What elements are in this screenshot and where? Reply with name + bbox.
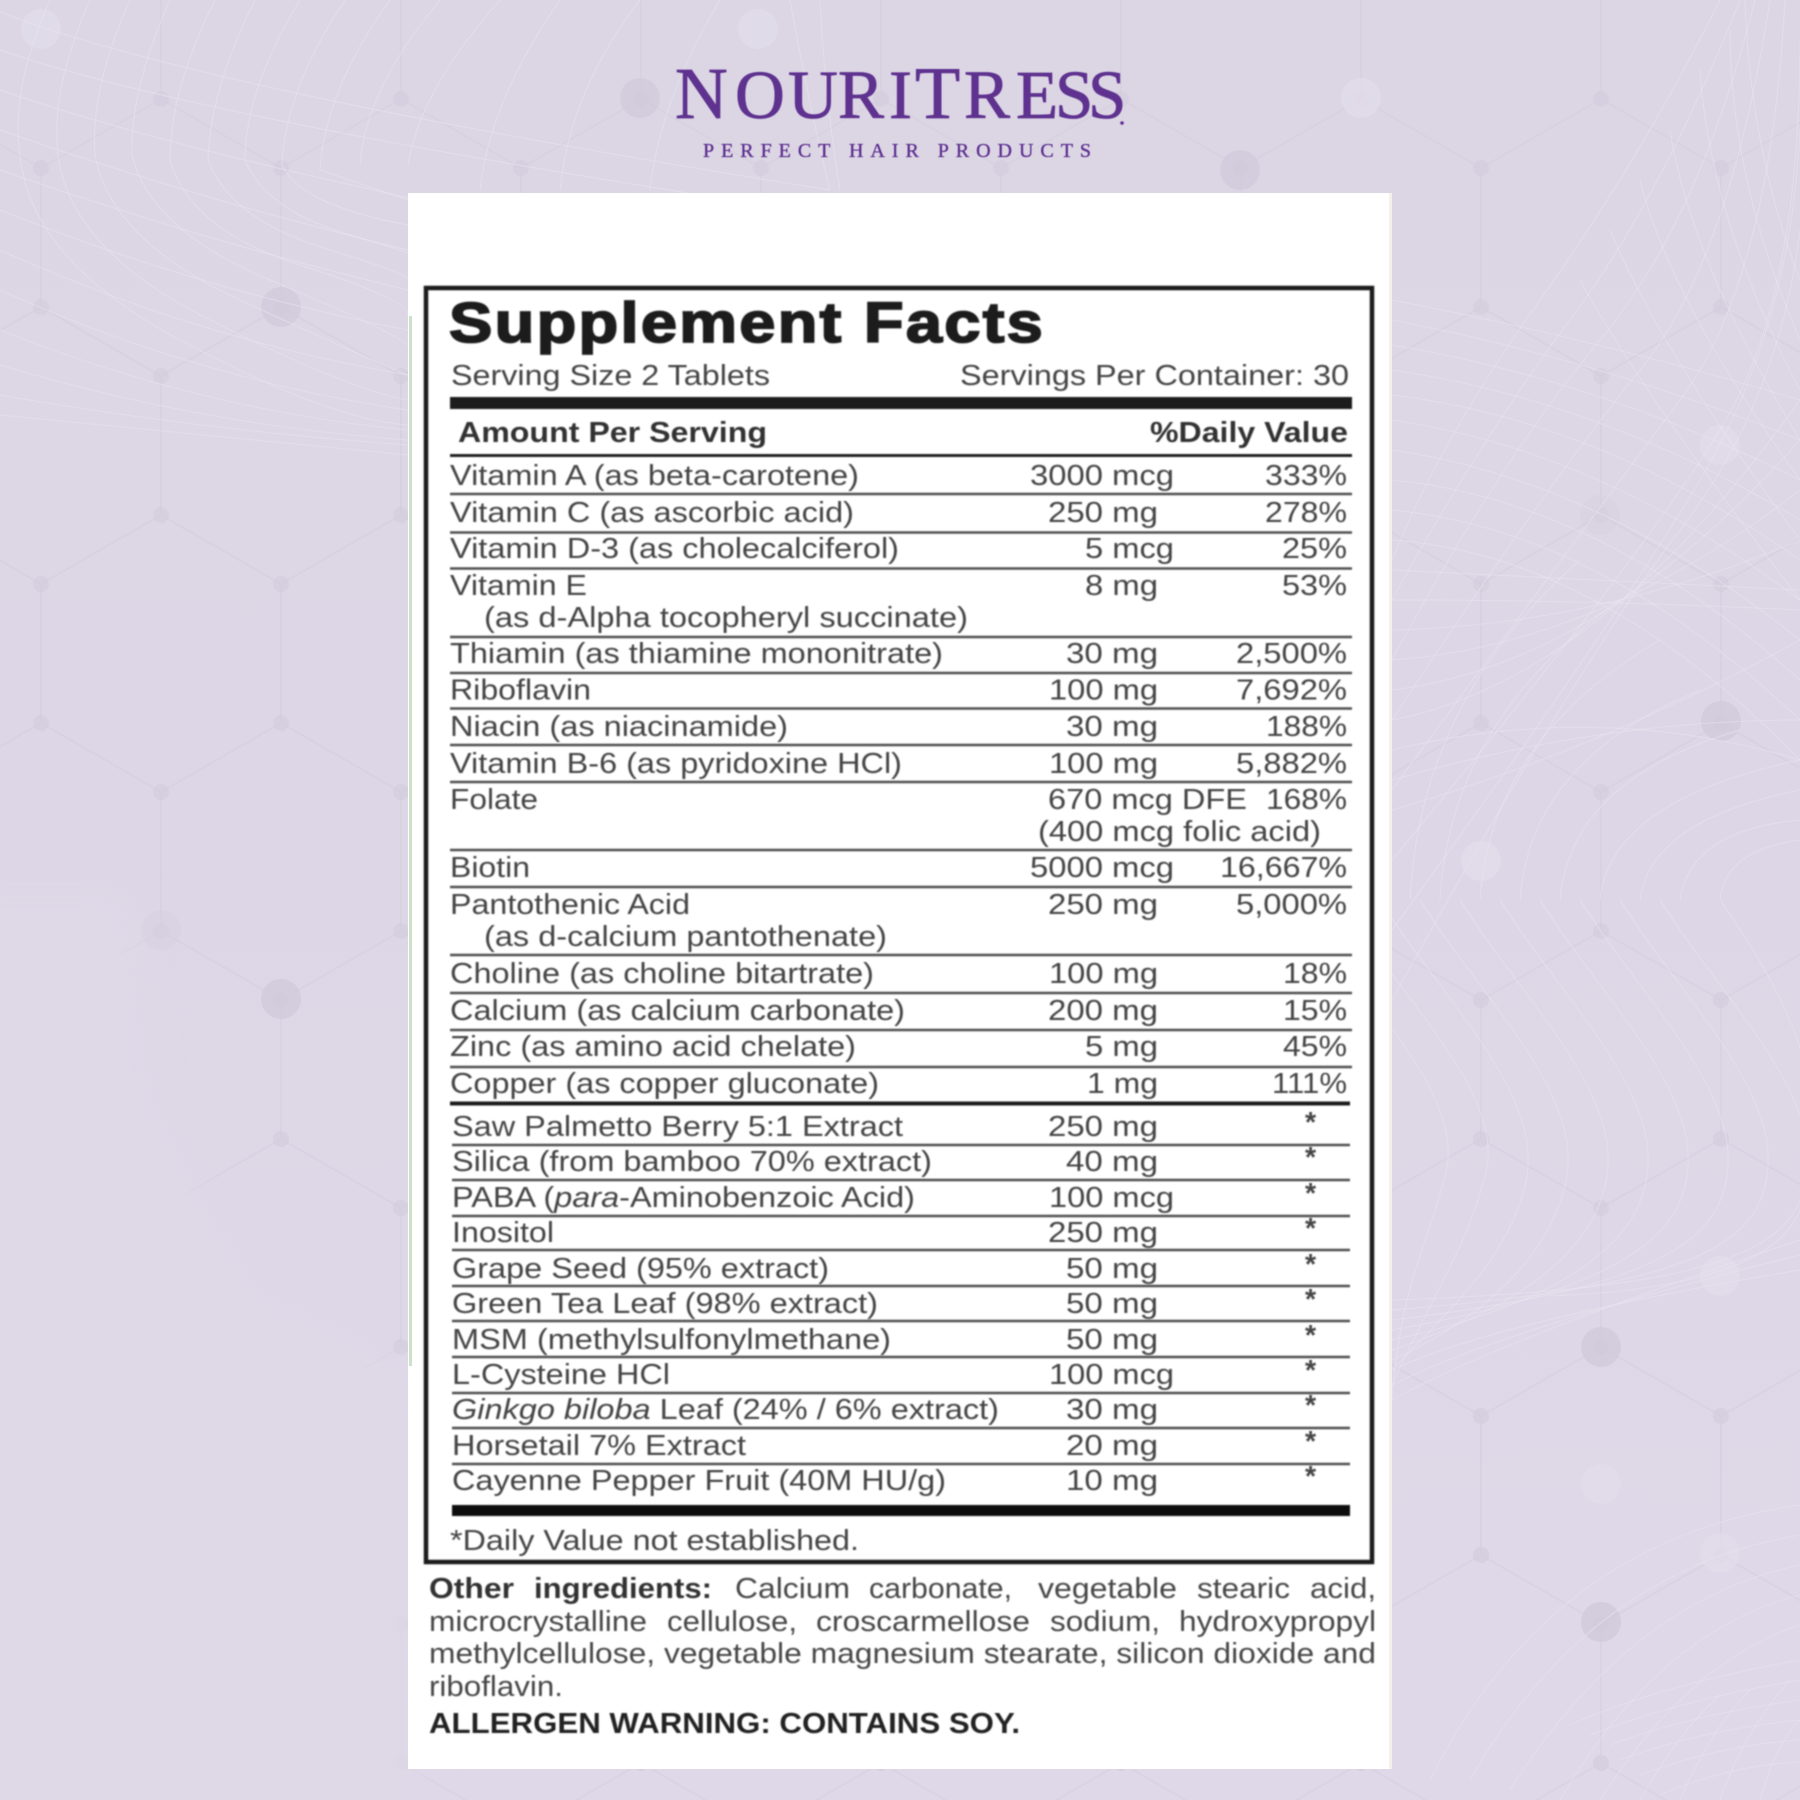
row: PABA: 100 mcg bbox=[1049, 1182, 1174, 1214]
row: Choline bbox=[450, 958, 1347, 990]
row: Green Tea Leaf: * bbox=[1305, 1284, 1317, 1316]
row: Riboflavin: 100 mg bbox=[1049, 674, 1158, 706]
row: Cayenne Pepper bbox=[452, 1461, 1317, 1497]
row: Vitamin A: 3000 mcg bbox=[1030, 460, 1174, 492]
row: L-Cysteine: L-Cysteine HCl bbox=[452, 1359, 670, 1391]
row: Green Tea Leaf: Green Tea Leaf (98% extract) bbox=[452, 1288, 878, 1320]
row: Biotin: 16,667% bbox=[1220, 852, 1347, 884]
serving size: Serving Size 2 Tablets bbox=[451, 360, 770, 392]
text block: other ingredients: Calcium bbox=[735, 1573, 850, 1605]
row: Choline: Choline (as choline bitartrate) bbox=[450, 958, 874, 990]
row: Calcium: 15% bbox=[1283, 995, 1347, 1027]
row: Copper: 111% bbox=[1272, 1068, 1347, 1100]
row: Copper: 1 mg bbox=[1087, 1068, 1158, 1100]
text block: other ingredients: stearic bbox=[1197, 1573, 1290, 1605]
row: Pantothenic Acid: (as d-calcium pantothenate) bbox=[484, 921, 887, 953]
row: MSM bbox=[452, 1320, 1317, 1356]
row: Niacin: Niacin (as niacinamide) bbox=[450, 711, 788, 743]
row: Thiamin: 2,500% bbox=[1236, 638, 1347, 670]
allergen warning: ALLERGEN WARNING: CONTAINS SOY. bbox=[429, 1708, 1020, 1740]
row: Biotin bbox=[450, 852, 1347, 884]
row: Pantothenic Acid: 5,000% bbox=[1236, 889, 1347, 921]
row: Cayenne Pepper: * bbox=[1305, 1461, 1317, 1493]
text block: other ingredients: Other bbox=[429, 1573, 514, 1605]
row: Pantothenic Acid: Pantothenic Acid bbox=[450, 889, 690, 921]
row: Folate bbox=[450, 784, 1347, 848]
row: Folate: 168% bbox=[1266, 784, 1347, 816]
wordmark: NOURITRESS bbox=[675, 53, 1126, 135]
row: PABA: * bbox=[1305, 1178, 1317, 1210]
row: Calcium bbox=[450, 995, 1347, 1027]
text block: other ingredients: cellulose, bbox=[667, 1606, 797, 1638]
column header: amount per serving: Amount Per Serving bbox=[458, 417, 767, 449]
text block: other ingredients: ingredients: bbox=[534, 1573, 712, 1605]
row: Grape Seed bbox=[452, 1249, 1317, 1285]
row: Biotin: 5000 mcg bbox=[1030, 852, 1174, 884]
tagline: PERFECT HAIR PRODUCTS bbox=[703, 140, 1091, 162]
row: Niacin: 30 mg bbox=[1066, 711, 1158, 743]
row: Horsetail: Horsetail 7% Extract bbox=[452, 1430, 746, 1462]
text block: other ingredients: sodium, bbox=[1050, 1606, 1160, 1638]
row: Green Tea Leaf: 50 mg bbox=[1066, 1288, 1158, 1320]
row: Riboflavin: Riboflavin bbox=[450, 674, 591, 706]
row: Vitamin E bbox=[450, 570, 1347, 634]
row: Vitamin B-6: Vitamin B-6 (as pyridoxine HCl) bbox=[450, 748, 902, 780]
row: L-Cysteine bbox=[452, 1355, 1317, 1391]
row: Calcium: 200 mg bbox=[1048, 995, 1158, 1027]
row: Inositol: * bbox=[1305, 1213, 1317, 1245]
row: Silica bbox=[452, 1142, 1317, 1178]
row: Folate: 670 mcg DFE bbox=[1048, 784, 1247, 816]
row: Copper bbox=[450, 1068, 1347, 1100]
row: Calcium: Calcium (as calcium carbonate) bbox=[450, 995, 905, 1027]
text block: other ingredients: vegetable bbox=[1038, 1573, 1177, 1605]
row: Zinc: 5 mg bbox=[1085, 1031, 1158, 1063]
row: Ginkgo biloba: Ginkgo biloba Leaf (24% / 6% extract) bbox=[452, 1394, 999, 1426]
row: Horsetail: 20 mg bbox=[1066, 1430, 1158, 1462]
row: Vitamin C bbox=[450, 497, 1347, 529]
heading: Supplement Facts: Supplement Facts bbox=[449, 291, 1045, 354]
row: Thiamin bbox=[450, 638, 1347, 670]
row: Saw Palmetto: * bbox=[1305, 1107, 1317, 1139]
row: MSM: MSM (methylsulfonylmethane) bbox=[452, 1324, 891, 1356]
column header: daily value: %Daily Value bbox=[1150, 417, 1348, 449]
row: Saw Palmetto bbox=[452, 1107, 1317, 1143]
row: Vitamin E: 8 mg bbox=[1085, 570, 1158, 602]
row: Vitamin A: Vitamin A (as beta-carotene) bbox=[450, 460, 859, 492]
row: Ginkgo biloba: * bbox=[1305, 1390, 1317, 1422]
row: Biotin: Biotin bbox=[450, 852, 530, 884]
servings per container: Servings Per Container: 30 bbox=[960, 360, 1349, 392]
row: Inositol: 250 mg bbox=[1048, 1217, 1158, 1249]
row: Vitamin B-6 bbox=[450, 748, 1347, 780]
row: Silica: Silica (from bamboo 70% extract) bbox=[452, 1146, 932, 1178]
row: Saw Palmetto: 250 mg bbox=[1048, 1111, 1158, 1143]
panel: white label card bbox=[408, 193, 1392, 1769]
row: PABA: PABA ( para -Aminobenzoic Acid) bbox=[452, 1182, 915, 1214]
row: Niacin bbox=[450, 711, 1347, 743]
row: Riboflavin bbox=[450, 674, 1347, 706]
row: Thiamin: 30 mg bbox=[1066, 638, 1158, 670]
row: Grape Seed: 50 mg bbox=[1066, 1253, 1158, 1285]
row: Cayenne Pepper: 10 mg bbox=[1066, 1465, 1158, 1497]
row: Ginkgo biloba: 30 mg bbox=[1066, 1394, 1158, 1426]
row: Ginkgo biloba bbox=[452, 1390, 1317, 1426]
row: MSM: 50 mg bbox=[1066, 1324, 1158, 1356]
row: Zinc: 45% bbox=[1283, 1031, 1347, 1063]
row: Zinc bbox=[450, 1031, 1347, 1063]
row: MSM: * bbox=[1305, 1320, 1317, 1352]
row: Vitamin D-3 bbox=[450, 533, 1347, 565]
row: Thiamin: Thiamin (as thiamine mononitrate) bbox=[450, 638, 943, 670]
row: Vitamin C: Vitamin C (as ascorbic acid) bbox=[450, 497, 854, 529]
text block: other ingredients: carbonate, bbox=[869, 1573, 1012, 1605]
row: Vitamin E: 53% bbox=[1282, 570, 1347, 602]
row: Silica: * bbox=[1305, 1142, 1317, 1174]
row: Vitamin A bbox=[450, 460, 1347, 492]
text block: other ingredients: riboflavin. bbox=[429, 1671, 563, 1703]
text block: other ingredients: croscarmellose bbox=[816, 1606, 1030, 1638]
text block: other ingredients: acid, bbox=[1310, 1573, 1376, 1605]
row: Zinc: Zinc (as amino acid chelate) bbox=[450, 1031, 856, 1063]
row: Pantothenic Acid: 250 mg bbox=[1048, 889, 1158, 921]
row: Vitamin B-6: 100 mg bbox=[1049, 748, 1158, 780]
text block: other ingredients: methylcellulose, vegetable magnesium stearate, silicon dioxide and bbox=[429, 1638, 1376, 1670]
row: Vitamin A: 333% bbox=[1265, 460, 1347, 492]
row: Inositol: Inositol bbox=[452, 1217, 554, 1249]
row: Folate: Folate bbox=[450, 784, 538, 816]
row: Vitamin D-3: 25% bbox=[1282, 533, 1347, 565]
row: Horsetail: * bbox=[1305, 1426, 1317, 1458]
row: Vitamin C: 278% bbox=[1265, 497, 1347, 529]
footnote: *Daily Value not established. bbox=[450, 1525, 859, 1557]
text block: other ingredients bbox=[429, 1573, 1376, 1703]
row: Cayenne Pepper: Cayenne Pepper Fruit (40M HU/g) bbox=[452, 1465, 946, 1497]
row: Vitamin E: (as d-Alpha tocopheryl succinate) bbox=[484, 602, 968, 634]
row: Silica: 40 mg bbox=[1066, 1146, 1158, 1178]
row: Pantothenic Acid bbox=[450, 889, 1347, 953]
logo: NouriTress bbox=[675, 53, 1126, 162]
text block: other ingredients: hydroxypropyl bbox=[1179, 1606, 1376, 1638]
row: Inositol bbox=[452, 1213, 1317, 1249]
row: L-Cysteine: 100 mcg bbox=[1049, 1359, 1174, 1391]
row: Green Tea Leaf bbox=[452, 1284, 1317, 1320]
row: Grape Seed: * bbox=[1305, 1249, 1317, 1281]
row: PABA bbox=[452, 1178, 1317, 1214]
row: Riboflavin: 7,692% bbox=[1236, 674, 1347, 706]
row: L-Cysteine: * bbox=[1305, 1355, 1317, 1387]
row: Vitamin D-3: Vitamin D-3 (as cholecalciferol) bbox=[450, 533, 899, 565]
row: Grape Seed: Grape Seed (95% extract) bbox=[452, 1253, 829, 1285]
row: Horsetail bbox=[452, 1426, 1317, 1462]
row: Choline: 18% bbox=[1283, 958, 1347, 990]
row: Niacin: 188% bbox=[1266, 711, 1347, 743]
row: Folate: (400 mcg folic acid) bbox=[1038, 816, 1321, 848]
row: Choline: 100 mg bbox=[1049, 958, 1158, 990]
row: Saw Palmetto: Saw Palmetto Berry 5:1 Extract bbox=[452, 1111, 903, 1143]
row: Vitamin C: 250 mg bbox=[1048, 497, 1158, 529]
row: Vitamin D-3: 5 mcg bbox=[1085, 533, 1174, 565]
text block: other ingredients: microcrystalline bbox=[429, 1606, 647, 1638]
row: Copper: Copper (as copper gluconate) bbox=[450, 1068, 879, 1100]
row: Vitamin B-6: 5,882% bbox=[1236, 748, 1347, 780]
row: Vitamin E: Vitamin E bbox=[450, 570, 587, 602]
